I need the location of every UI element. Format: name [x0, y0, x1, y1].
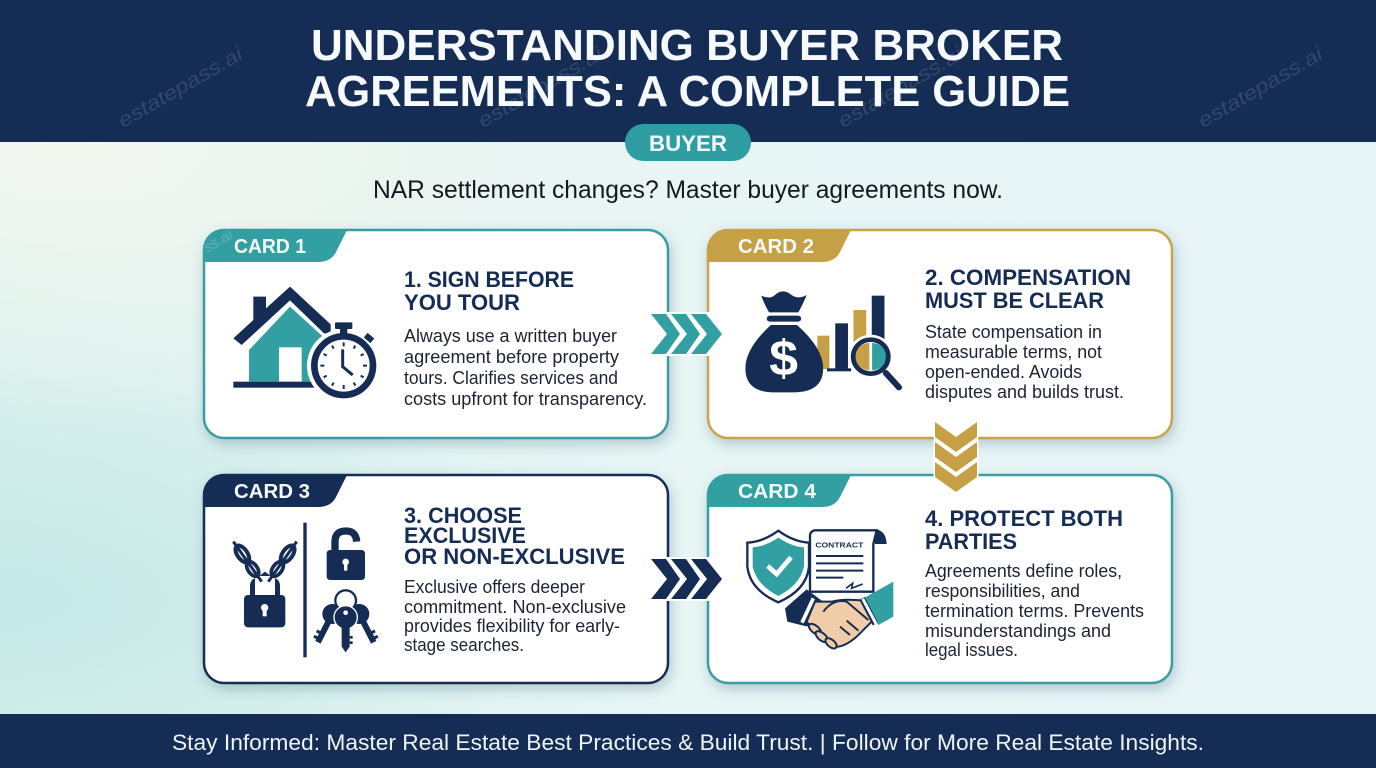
card 3 body text: provides flexibility for early-: [404, 616, 620, 636]
panel: card 4: [708, 475, 1172, 683]
card 2 body text: measurable terms, not: [925, 342, 1102, 362]
card 3 body text: commitment. Non-exclusive: [404, 597, 626, 617]
footer band: [0, 714, 1376, 768]
panel: card 1: ss.ai: [200, 226, 236, 256]
card 1 body text: tours. Clarifies services and: [404, 368, 618, 388]
card 4 body text: termination terms. Prevents: [925, 601, 1144, 621]
card 2 body text: open-ended. Avoids: [925, 362, 1082, 382]
card 4 tab label: CARD 4: [738, 481, 817, 503]
card 3 body text: Exclusive offers deeper: [404, 577, 585, 597]
card 2 tab label: CARD 2: [738, 236, 814, 258]
icon: house with stopwatch: [233, 287, 380, 402]
icon: money bag with chart and magnifier: [745, 291, 899, 392]
card 4 body text: misunderstandings and: [925, 621, 1111, 641]
card 3 body text: [404, 577, 626, 655]
card 1 body text: [404, 326, 647, 409]
panel: card 2: [708, 230, 1172, 438]
card 1 heading: [404, 267, 574, 315]
icon: shield, contract and handshake: CONTRACT: [815, 540, 864, 549]
category pill: buyer: [625, 124, 751, 161]
card 2 heading: 2. COMPENSATION: [925, 265, 1131, 290]
footer band: Stay Informed: Master Real Estate Best Practices & Build Trust. | Follow for More Real Estate Insights.: [172, 730, 1204, 755]
title: UNDERSTANDING BUYER BROKER: [311, 21, 1063, 70]
arrow: card 3 to card 4: [651, 557, 722, 601]
card 4 heading: PARTIES: [925, 529, 1017, 554]
arrow: card 1 to card 2: [651, 312, 722, 356]
card 1 tab label: CARD 1: [234, 236, 306, 258]
title: AGREEMENTS: A COMPLETE GUIDE: [305, 67, 1070, 116]
card 2 body text: disputes and builds trust.: [925, 382, 1124, 402]
card 4 heading: 4. PROTECT BOTH: [925, 506, 1123, 531]
card 2 heading: MUST BE CLEAR: [925, 288, 1104, 313]
card 4 heading: [925, 506, 1123, 554]
header band: estatepass.ai: [114, 43, 247, 132]
icon: money bag with chart and magnifier: $: [769, 330, 798, 386]
subtitle: NAR settlement changes? Master buyer agreements now.: [373, 176, 1003, 204]
card 2 body text: State compensation in: [925, 322, 1102, 342]
arrow: card 2 to card 4: [934, 422, 978, 492]
card 1 body text: costs upfront for transparency.: [404, 389, 647, 409]
card 1 body text: agreement before property: [404, 347, 619, 367]
card 1 body text: Always use a written buyer: [404, 326, 617, 346]
header band: estatepass.ai: [1194, 43, 1327, 132]
card 2 heading: [925, 265, 1131, 313]
panel: card 3: [204, 475, 668, 683]
card 1 heading: YOU TOUR: [404, 290, 520, 315]
panel: card 1: [200, 226, 668, 438]
card 1 heading: 1. SIGN BEFORE: [404, 267, 574, 292]
card 2 body text: [925, 322, 1124, 402]
card 3 body text: stage searches.: [404, 635, 524, 655]
header band: estatepass.ai: [474, 43, 607, 132]
card 3 heading: EXCLUSIVE: [404, 523, 526, 548]
icon: shield, contract and handshake: [747, 529, 893, 650]
card 3 heading: 3. CHOOSE: [404, 503, 522, 528]
card 3 heading: [404, 503, 625, 569]
category pill: buyer: BUYER: [649, 131, 727, 156]
card 4 body text: responsibilities, and: [925, 581, 1080, 601]
card 4 body text: [925, 561, 1144, 660]
header band: [0, 0, 1376, 142]
title: [305, 21, 1070, 116]
page background: [0, 142, 1376, 714]
icon: locked chain, divider, open lock and keys: [233, 523, 383, 657]
card 3 heading: OR NON-EXCLUSIVE: [404, 544, 625, 569]
card 3 tab label: CARD 3: [234, 481, 310, 503]
card 4 body text: Agreements define roles,: [925, 561, 1122, 581]
header band: estatepass.ai: [834, 43, 967, 132]
card 4 body text: legal issues.: [925, 640, 1018, 660]
